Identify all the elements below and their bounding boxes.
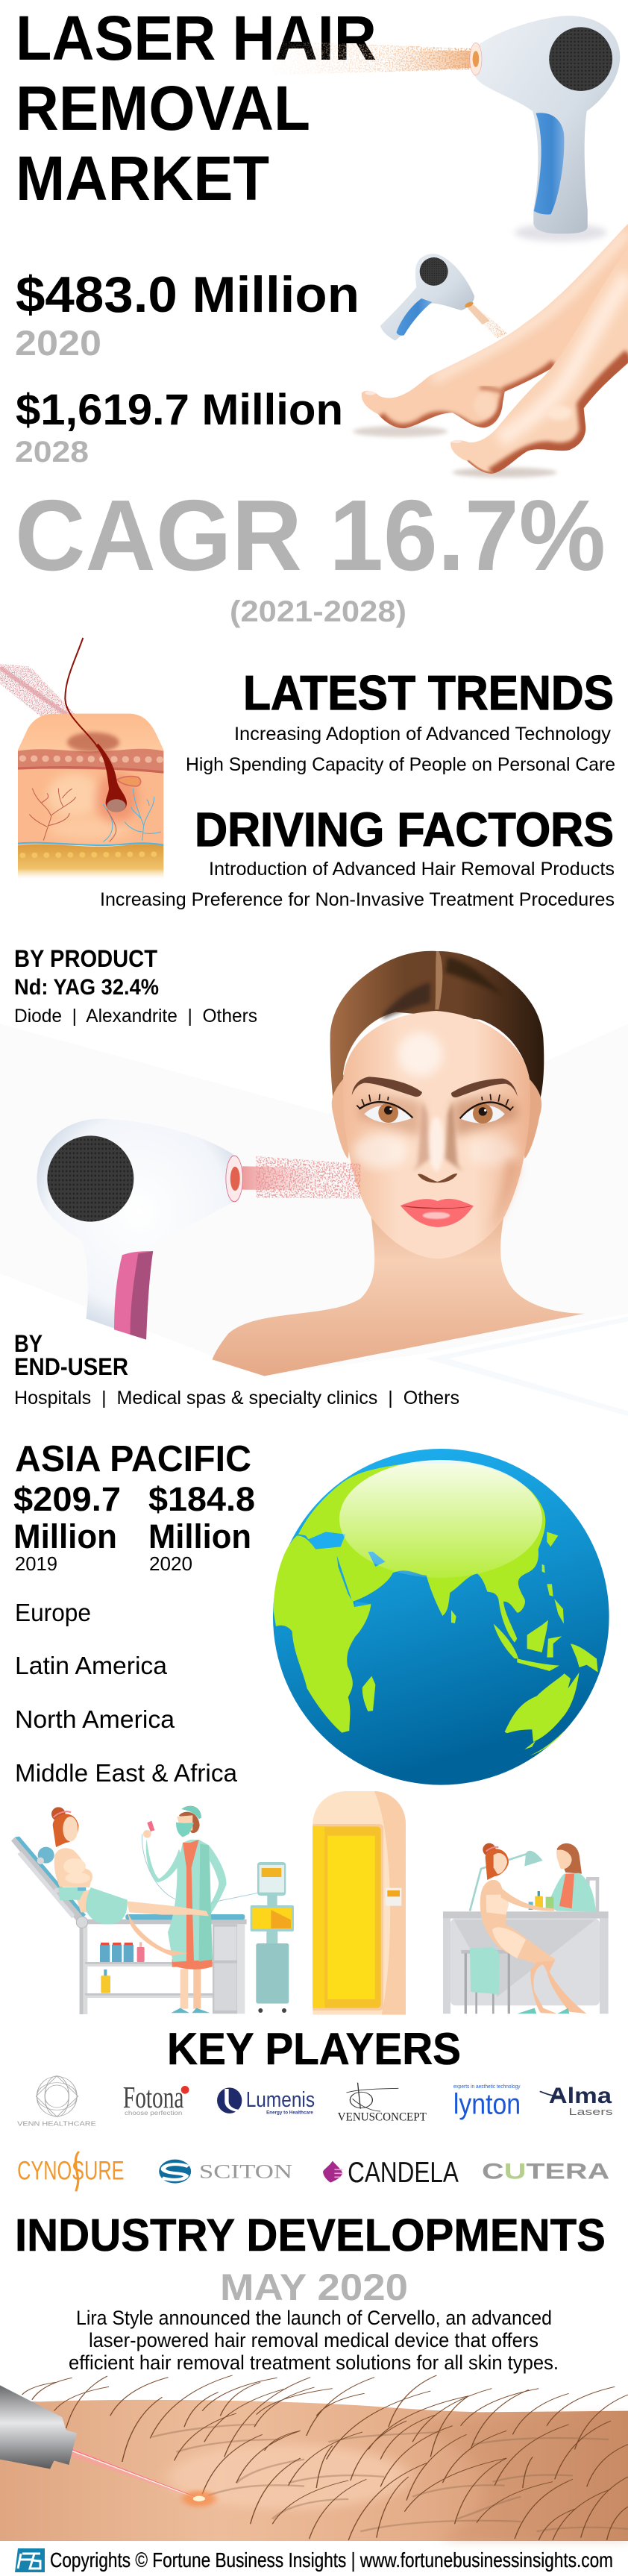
logo: lumenis: Lumenis [246, 2088, 315, 2112]
title: LASER HAIR [16, 3, 377, 73]
title: REMOVAL [16, 73, 310, 143]
panel: by product: BY PRODUCT [14, 945, 157, 972]
panel: regional figures: $209.7 [13, 1480, 121, 1518]
development date and description: Lira Style announced the launch of Cervello, an advanced [76, 2307, 552, 2329]
market value 2028 [15, 386, 343, 468]
panel: regional figures: North America [15, 1705, 175, 1733]
panel: by end-user: END-USER [14, 1353, 128, 1380]
market value 2020: 2020 [15, 323, 101, 363]
laser machine [251, 1862, 294, 2013]
panel: latest trends: High Spending Capacity of People on Personal Care [186, 754, 615, 775]
development date and description: laser-powered hair removal medical device that offers [89, 2329, 538, 2351]
logo: cynosure [17, 2152, 124, 2191]
logo: lumenis [217, 2087, 315, 2115]
illustration: cabin door and consultation scene [313, 1791, 609, 2015]
logo: candela [323, 2156, 459, 2189]
panel: by product: Nd: YAG 32.4% [14, 975, 159, 1000]
logo: venn healthcare [17, 2076, 96, 2128]
panel: latest trends: Increasing Adoption of Advanced Technology [234, 724, 611, 745]
market value 2028: 2028 [15, 436, 89, 468]
patient [51, 1807, 128, 1924]
panel: driving factors: DRIVING FACTORS [195, 803, 614, 856]
panel: by product [14, 945, 257, 1027]
logo: cutera: CUTERA [482, 2159, 609, 2184]
logo: lynton [453, 2084, 521, 2120]
panel: driving factors [100, 803, 615, 910]
illustration: treatment bed, patient, practitioner and laser machine [11, 1806, 294, 2014]
logo: fortune business insights [15, 2548, 45, 2572]
panel: regional figures: Million [148, 1517, 251, 1555]
market value 2020: $483.0 Million [16, 266, 359, 323]
development date and description: efficient hair removal treatment solutions for all skin types. [69, 2351, 559, 2374]
icon: laser hair removal device with beam [272, 16, 620, 242]
illustration: pink laser device with beam [37, 1119, 360, 1340]
development date and description [69, 2266, 559, 2374]
logo: sciton [159, 2160, 292, 2184]
cabin door [313, 1791, 406, 2015]
illustration: skin cross-section with hair follicle [0, 638, 163, 879]
logo: fotona: choose perfection [125, 2110, 182, 2116]
company logos: Fotona [123, 2080, 184, 2115]
logo: sciton: SCITON [199, 2160, 292, 2182]
panel: regional figures [13, 1439, 255, 1787]
consultation desk and lamp [443, 1851, 609, 2014]
patient leg over table [127, 1901, 209, 1956]
practitioner [142, 1806, 258, 2013]
market value 2020 [15, 266, 359, 363]
panel: regional figures: $184.8 [148, 1480, 255, 1518]
logo: lynton: experts in aesthetic technology [453, 2084, 521, 2090]
client [470, 1843, 587, 2014]
panel: regional figures: ASIA PACIFIC [15, 1439, 251, 1479]
logo: alma lasers [540, 2084, 613, 2117]
panel: regional figures: Latin America [15, 1652, 168, 1679]
illustration: neck and shoulders [213, 1199, 585, 1376]
logo: venus concept: VENUSCONCEPT [338, 2110, 427, 2123]
panel: by end-user: BY [14, 1330, 43, 1357]
panel: by end-user [14, 1330, 459, 1408]
illustration: woman's face [330, 951, 544, 1259]
background panel behind face [0, 1024, 628, 1416]
company logos: CANDELA [348, 2156, 459, 2189]
market value 2028: $1,619.7 Million [16, 386, 343, 434]
CAGR: CAGR 16.7% [15, 479, 606, 592]
icon: globe [273, 1449, 609, 1785]
panel: regional figures: 2020 [149, 1552, 192, 1575]
logo: lumenis: Energy to Healthcare [266, 2110, 313, 2115]
CAGR: (2021-2028) [230, 595, 406, 628]
illustration: skin with hair and laser [0, 2375, 628, 2541]
panel: by end-user: Hospitals | Medical spas & specialty clinics | Others [14, 1388, 459, 1408]
panel: driving factors: Introduction of Advanced Hair Removal Products [209, 859, 615, 880]
panel: latest trends [186, 665, 615, 775]
company logos: CYNOSURE [17, 2156, 124, 2185]
treatment bed [11, 1837, 247, 2014]
therapist [529, 1843, 596, 1912]
panel: regional figures: Middle East & Africa [15, 1759, 238, 1787]
panel: by product: Diode | Alexandrite | Others [14, 1006, 257, 1027]
logo: lynton: lynton [453, 2087, 521, 2120]
panel: regional figures: Europe [15, 1599, 91, 1626]
logo: alma lasers: Lasers [569, 2107, 613, 2117]
panel: regional figures: Million [13, 1517, 117, 1555]
logo: venn healthcare: VENN HEALTHCARE [17, 2120, 96, 2128]
logo: venus concept [338, 2083, 427, 2123]
development date and description: MAY 2020 [220, 2266, 408, 2308]
heading: industry developments: INDUSTRY DEVELOPMENTS [15, 2210, 606, 2260]
heading: key players: KEY PLAYERS [167, 2024, 461, 2074]
logo: fotona [123, 2080, 189, 2116]
title: MARKET [16, 143, 269, 213]
company logos [17, 2076, 613, 2191]
title [16, 3, 377, 213]
panel: regional figures: 2019 [15, 1552, 57, 1575]
illustration: legs with small laser device [353, 224, 628, 477]
panel: driving factors: Increasing Preference for Non-Invasive Treatment Procedures [100, 889, 615, 910]
